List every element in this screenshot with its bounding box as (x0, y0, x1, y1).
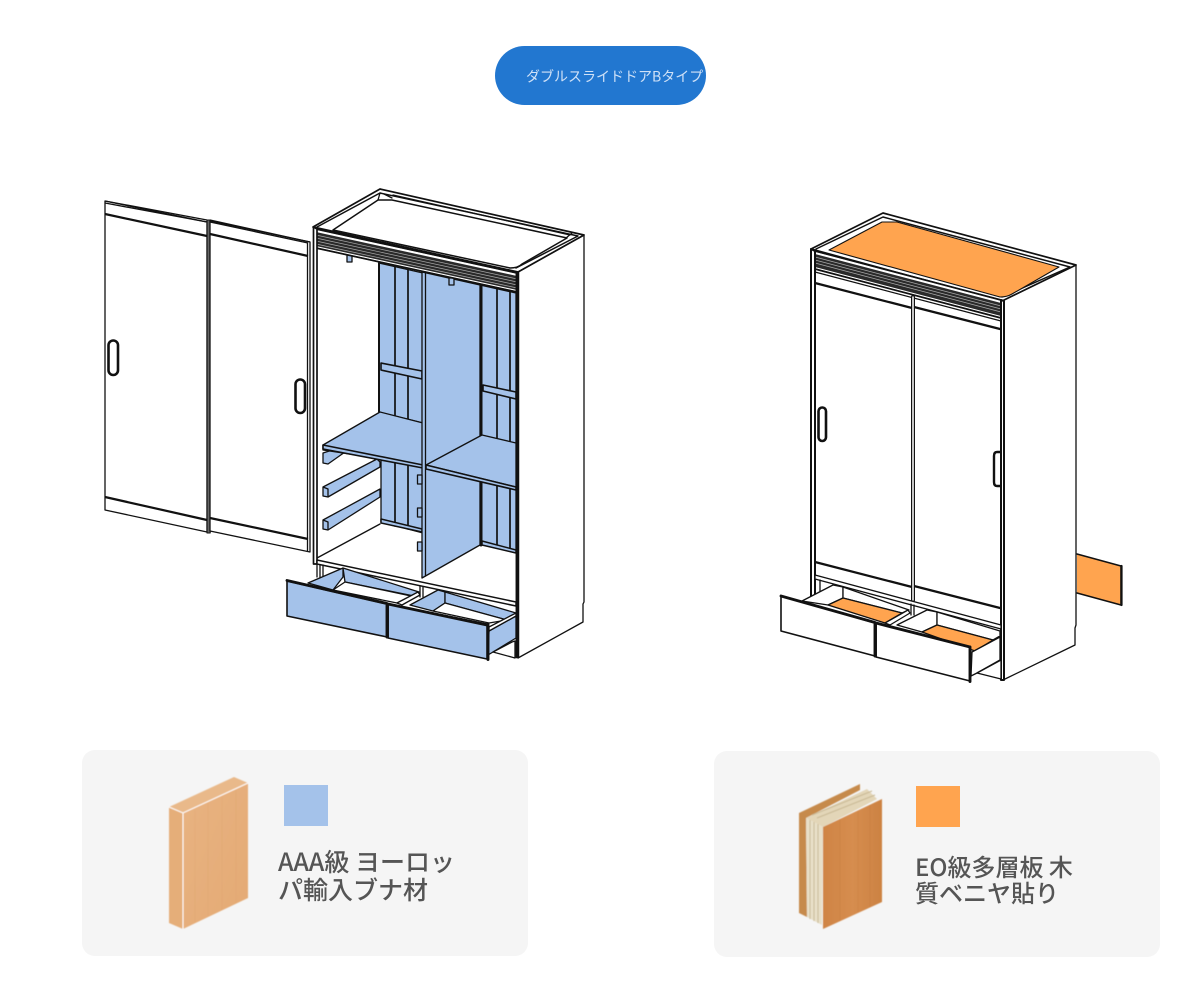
cabinet top (313, 189, 584, 272)
door panels (815, 272, 1001, 608)
material card: beech (82, 750, 528, 956)
louver band (815, 251, 1001, 318)
back panel upper right (480, 285, 516, 445)
cabinet front (811, 249, 1002, 680)
floor outline (317, 524, 482, 577)
right shelf front edge (426, 465, 516, 490)
drawer left front (287, 581, 387, 637)
door handle left (818, 408, 826, 441)
open cabinet with beech parts in blue (287, 189, 584, 660)
exploded sliding doors (105, 201, 310, 552)
drawer left front (781, 596, 875, 656)
drawer right front (388, 604, 487, 659)
door: right panel (210, 220, 310, 552)
title pill: ダブルスライドドアBタイプ (526, 66, 703, 86)
door handle right (994, 452, 1000, 486)
base rails (815, 575, 1001, 629)
cabinet side panel (1002, 265, 1076, 680)
center divider (422, 272, 481, 578)
plywood board image (799, 784, 882, 929)
beech label: パ輸入ブナ材 (278, 871, 428, 907)
clothes rail 2 (323, 459, 380, 497)
louver band (316, 229, 517, 292)
side plywood piece (1077, 554, 1122, 605)
drawer right front (876, 623, 970, 681)
door: left panel (105, 201, 207, 532)
base supports (815, 579, 914, 615)
cabinet top (811, 213, 1076, 301)
plywood label: EO級多層板 木 (915, 848, 1073, 883)
interior opening (317, 230, 516, 602)
beech board image (169, 777, 248, 929)
base rail (317, 560, 516, 606)
closed cabinet with plywood parts in orange (781, 213, 1122, 682)
material card: plywood (714, 751, 1160, 957)
top plywood panel (829, 222, 1059, 297)
shelf brackets (347, 255, 454, 551)
back panel upper left (379, 263, 423, 423)
base supports (317, 564, 423, 597)
right shelf (426, 435, 516, 487)
beech label: AAA級 ヨーロッ (278, 843, 455, 879)
door: center stile (207, 220, 210, 533)
plywood label: 質ベニヤ貼り (915, 874, 1059, 909)
drawer left interior (308, 568, 420, 605)
drawer right interior (410, 590, 516, 658)
drawer right interior (897, 610, 1001, 679)
plywood color swatch (916, 786, 960, 827)
clothes rail 1 (323, 446, 345, 464)
back panel lower left (381, 455, 423, 533)
left and right posts (314, 227, 519, 658)
left shelf front edge (323, 445, 423, 468)
drawer front bold edges (781, 596, 970, 682)
clothes rail 3 (323, 489, 380, 530)
left shelf (323, 412, 423, 465)
drawer front bold edges (287, 580, 488, 660)
title pill (495, 46, 706, 105)
back panel lower right (481, 480, 516, 553)
drawer left interior (802, 585, 910, 625)
posts (811, 249, 1004, 680)
cabinet side panel (518, 235, 584, 658)
beech color swatch (284, 785, 328, 826)
